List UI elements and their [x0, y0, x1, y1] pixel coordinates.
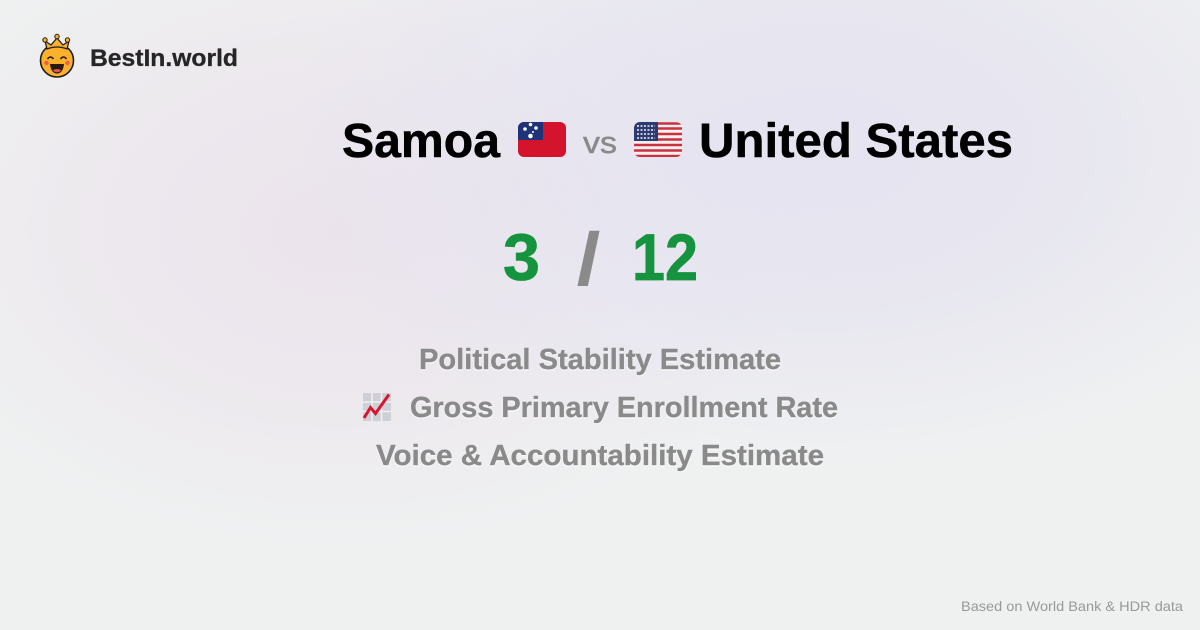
icon: Samoa flag: [518, 122, 566, 157]
indicator: political stability: Political Stability Estimate: [419, 344, 781, 376]
logo: [40, 34, 238, 77]
score: United States: 12: [632, 220, 698, 294]
indicator: voice and accountability: Voice & Accountability Estimate: [376, 440, 824, 472]
logo text: BestIn.world: [90, 45, 238, 72]
score: [503, 219, 698, 300]
footer source note: Based on World Bank & HDR data: [961, 598, 1183, 614]
icon: chart increasing: [363, 393, 391, 421]
title row: [343, 122, 1012, 158]
separator: /: [577, 219, 600, 300]
score: Samoa: 3: [503, 220, 540, 294]
icon: US flag: [634, 122, 682, 157]
indicator: gross primary enrollment: Gross Primary Enrollment Rate: [410, 392, 838, 424]
vs label: vs: [583, 125, 617, 160]
country name: United States: United States: [699, 115, 1013, 168]
icon: crown emoji face: [40, 34, 74, 77]
indicator list: [363, 344, 838, 472]
country name: Samoa: Samoa: [342, 115, 500, 168]
